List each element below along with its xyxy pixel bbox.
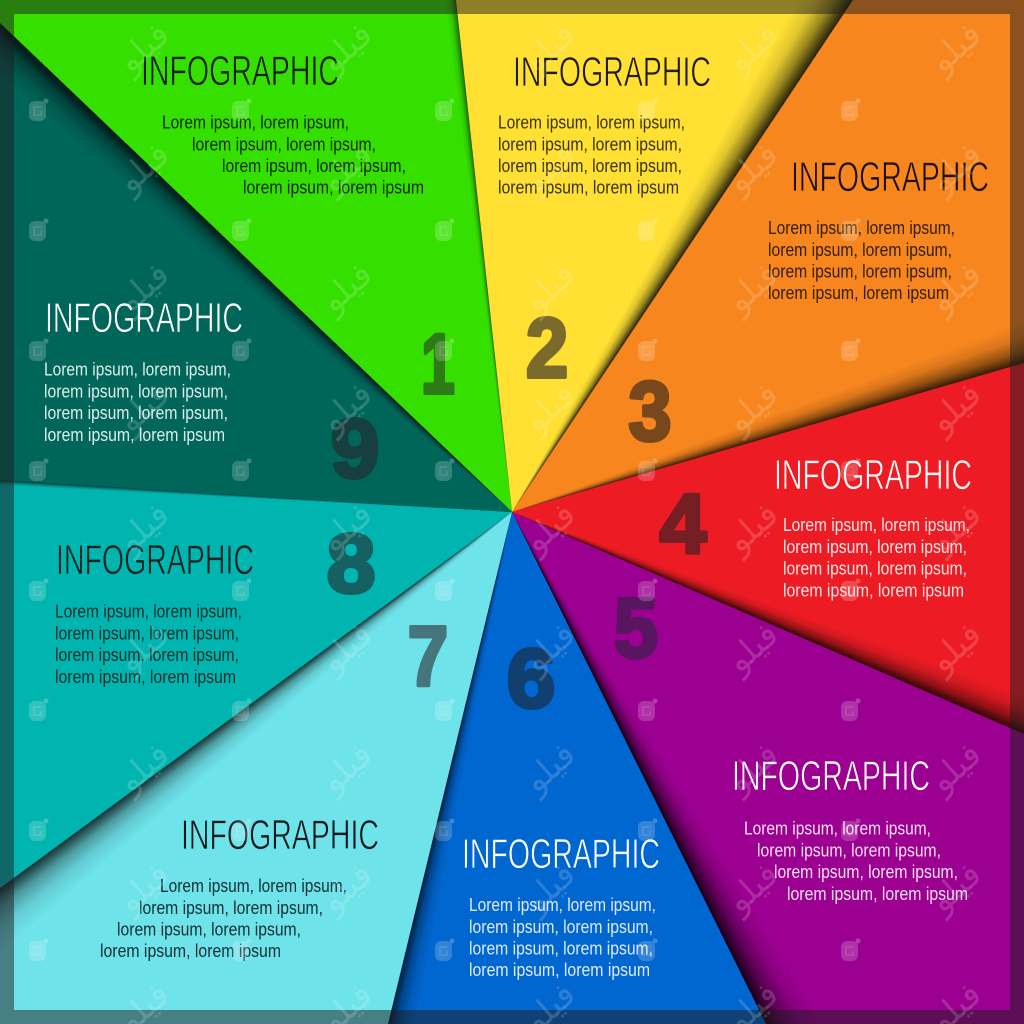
body text 2: lorem ipsum, lorem ipsum, [498,156,682,176]
watermark overlay: فيلو [514,134,584,203]
body text 5: lorem ipsum, lorem ipsum, [757,840,941,860]
watermark overlay: فيلو [920,854,990,923]
body text 9: lorem ipsum, lorem ipsum [44,425,225,445]
watermark overlay: فيلو [514,734,584,803]
body text 1: lorem ipsum, lorem ipsum, [192,134,376,154]
watermark overlay: فيلو [717,614,787,683]
body text 4 [783,515,970,600]
body text 9: lorem ipsum, lorem ipsum, [44,403,228,423]
panel 7: light cyan wedge [0,512,512,1024]
watermark overlay: فيلو [311,734,381,803]
watermark overlay: فيلو [311,614,381,683]
title 7: INFOGRAPHIC [181,811,379,858]
body text 5: lorem ipsum, lorem ipsum [787,884,968,904]
number 9: 9 [331,402,379,496]
body text 2: Lorem ipsum, lorem ipsum, [498,113,685,133]
watermark overlay: فيلو [311,494,381,563]
body text 8: lorem ipsum, lorem ipsum, [55,623,239,643]
number 6: 6 [507,632,555,726]
panel 9: dark teal wedge [0,23,512,512]
watermark overlay: فيلو [717,254,787,323]
watermark overlay: فيلو [311,374,381,443]
body text 5: lorem ipsum, lorem ipsum, [774,862,958,882]
title 8: INFOGRAPHIC [56,536,254,583]
number 4: 4 [660,477,707,571]
body text 9: lorem ipsum, lorem ipsum, [44,381,228,401]
panel 8: teal wedge [0,480,512,888]
body text 3: lorem ipsum, lorem ipsum [768,283,949,303]
watermark overlay: فيلو [717,494,787,563]
body text 5: Lorem ipsum, lorem ipsum, [744,819,931,839]
watermark overlay: فيلو [108,374,178,443]
watermark overlay: فيلو [311,134,381,203]
watermark overlay: فيلو [108,854,178,923]
watermark overlay: فيلو [108,14,178,83]
watermark overlay: فيلو [717,854,787,923]
number 5: 5 [614,582,658,676]
body text 1: lorem ipsum, lorem ipsum, [222,156,406,176]
body text 7: lorem ipsum, lorem ipsum, [117,920,301,940]
body text 3: Lorem ipsum, lorem ipsum, [768,218,955,238]
body text 3 [768,218,955,303]
panel 6: blue wedge [388,512,766,1024]
watermark overlay: فيلو [920,494,990,563]
number 7: 7 [408,609,448,703]
title 1: INFOGRAPHIC [141,47,339,94]
watermark overlay: فيلو [514,254,584,323]
body text 8: Lorem ipsum, lorem ipsum, [55,602,242,622]
body text 8: lorem ipsum, lorem ipsum, [55,645,239,665]
body text 8 [55,602,242,687]
watermark overlay: فيلو [514,854,584,923]
watermark overlay: فيلو [311,14,381,83]
body text 6: lorem ipsum, lorem ipsum, [469,939,653,959]
body text 2: lorem ipsum, lorem ipsum [498,178,679,198]
watermark overlay: فيلو [717,134,787,203]
body text 6 [469,895,656,980]
panel 3: orange wedge [512,0,1024,512]
body text 9: Lorem ipsum, lorem ipsum, [44,360,231,380]
panel 2: yellow wedge [456,0,853,512]
watermark overlay: فيلو [920,14,990,83]
watermark overlay: فيلو [108,134,178,203]
watermark overlay: فيلو [514,374,584,443]
body text 2: lorem ipsum, lorem ipsum, [498,134,682,154]
body text 2 [498,113,685,198]
body text 1 [162,113,424,198]
watermark overlay: فيلو [514,14,584,83]
body text 6: lorem ipsum, lorem ipsum, [469,917,653,937]
watermark overlay: فيلو [920,134,990,203]
body text 7 [100,876,347,961]
title 6: INFOGRAPHIC [462,830,660,877]
body text 9 [44,360,231,445]
watermark overlay: فيلو [311,854,381,923]
title 9: INFOGRAPHIC [45,294,243,341]
body text 7: lorem ipsum, lorem ipsum [100,941,281,961]
number 8: 8 [327,517,375,611]
panel 5: purple wedge [512,512,1024,1024]
watermark overlay: فيلو [920,254,990,323]
body text 5 [744,819,968,904]
watermark overlay: فيلو [514,494,584,563]
panel 1: green wedge [0,0,512,512]
body text 1: Lorem ipsum, lorem ipsum, [162,113,349,133]
number 3: 3 [629,365,671,459]
body text 3: lorem ipsum, lorem ipsum, [768,262,952,282]
panel 4: red wedge [512,363,1024,734]
body text 6: lorem ipsum, lorem ipsum [469,960,650,980]
number 2: 2 [526,301,568,395]
body text 4: lorem ipsum, lorem ipsum, [783,537,967,557]
watermark overlay: فيلو [311,254,381,323]
watermark overlay: فيلو [920,614,990,683]
watermark overlay: فيلو [108,494,178,563]
title 2: INFOGRAPHIC [513,48,711,95]
body text 4: lorem ipsum, lorem ipsum [783,580,964,600]
watermark overlay: فيلو [108,254,178,323]
title 5: INFOGRAPHIC [732,752,930,799]
watermark overlay: فيلو [717,734,787,803]
body text 8: lorem ipsum, lorem ipsum [55,667,236,687]
watermark overlay: فيلو [514,614,584,683]
body text 7: Lorem ipsum, lorem ipsum, [160,876,347,896]
watermark overlay: فيلو [108,614,178,683]
body text 6: Lorem ipsum, lorem ipsum, [469,895,656,915]
watermark overlay: فيلو [717,14,787,83]
body text 4: lorem ipsum, lorem ipsum, [783,559,967,579]
watermark overlay: فيلو [920,374,990,443]
body text 7: lorem ipsum, lorem ipsum, [139,898,323,918]
number 1: 1 [421,317,455,411]
watermark overlay: فيلو [920,734,990,803]
body text 3: lorem ipsum, lorem ipsum, [768,240,952,260]
watermark overlay: فيلو [717,374,787,443]
body text 4: Lorem ipsum, lorem ipsum, [783,515,970,535]
body text 1: lorem ipsum, lorem ipsum [243,178,424,198]
watermark overlay: فيلو [108,734,178,803]
